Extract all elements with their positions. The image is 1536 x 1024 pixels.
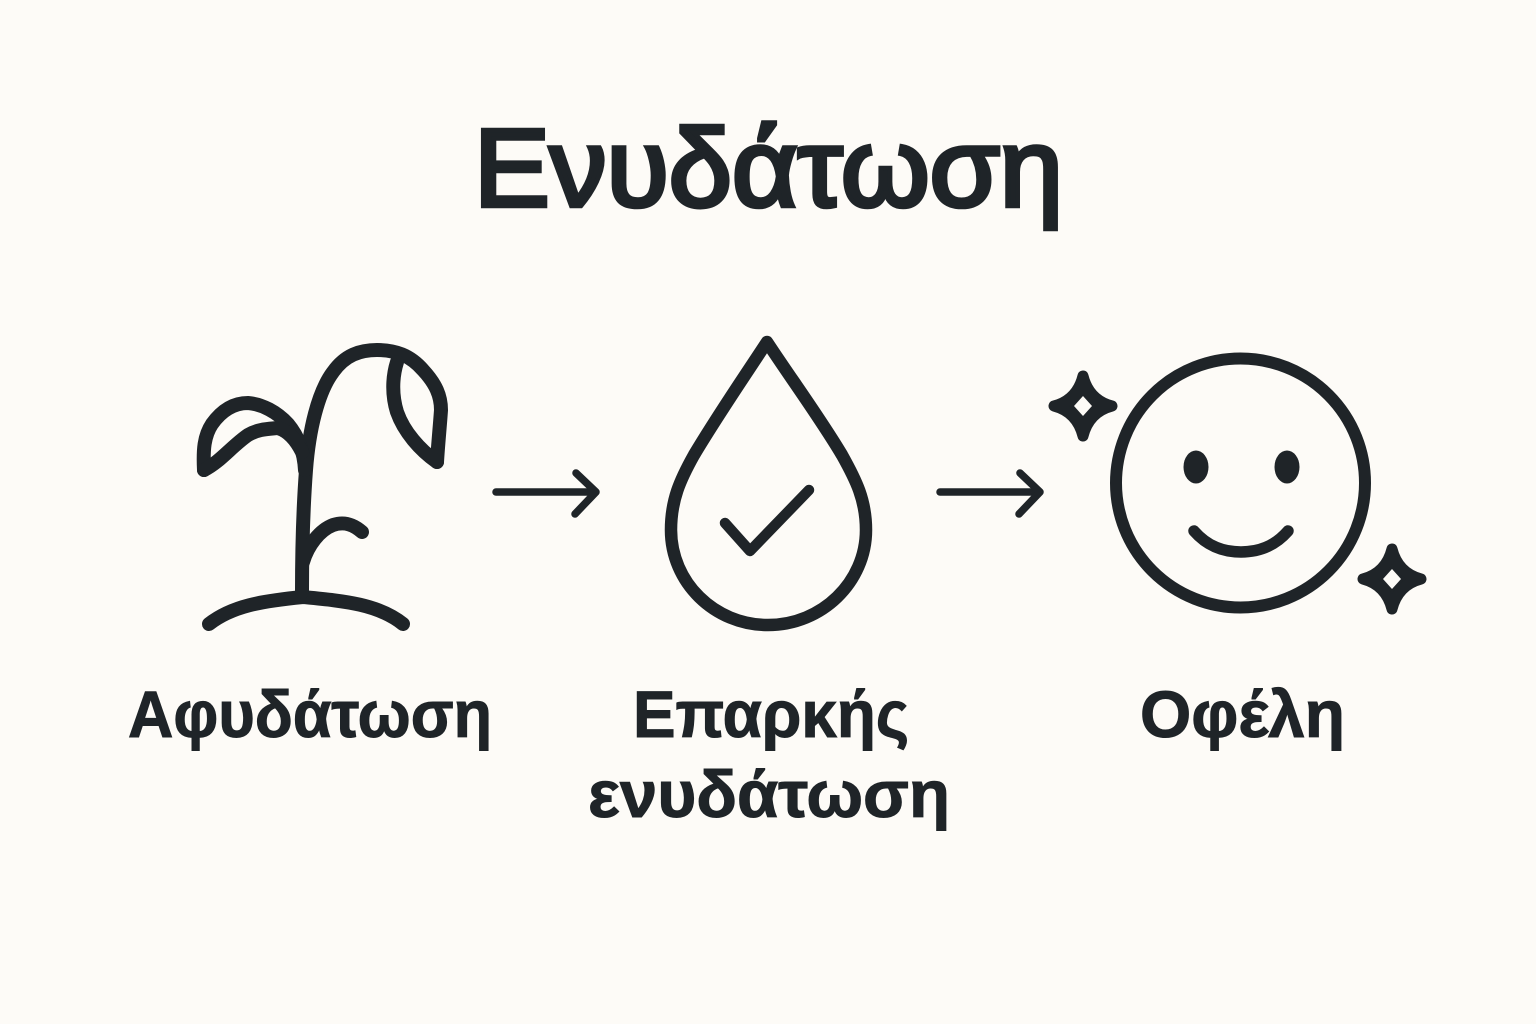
label: adequate hydration: ενυδάτωση	[588, 757, 950, 831]
icon: water drop with check	[671, 342, 866, 625]
label: benefits: Οφέλη	[1140, 677, 1345, 751]
label: adequate hydration: Επαρκής	[633, 677, 909, 751]
icon: wilted plant	[204, 350, 441, 624]
label: dehydration: Αφυδάτωση	[128, 677, 492, 751]
arrow: hydration to benefits	[940, 473, 1040, 514]
icon: smiling face with sparkles	[1054, 358, 1421, 609]
title: Ενυδάτωση	[474, 107, 1063, 230]
label: adequate hydration	[588, 677, 950, 831]
arrow: dehydration to hydration	[496, 473, 596, 514]
